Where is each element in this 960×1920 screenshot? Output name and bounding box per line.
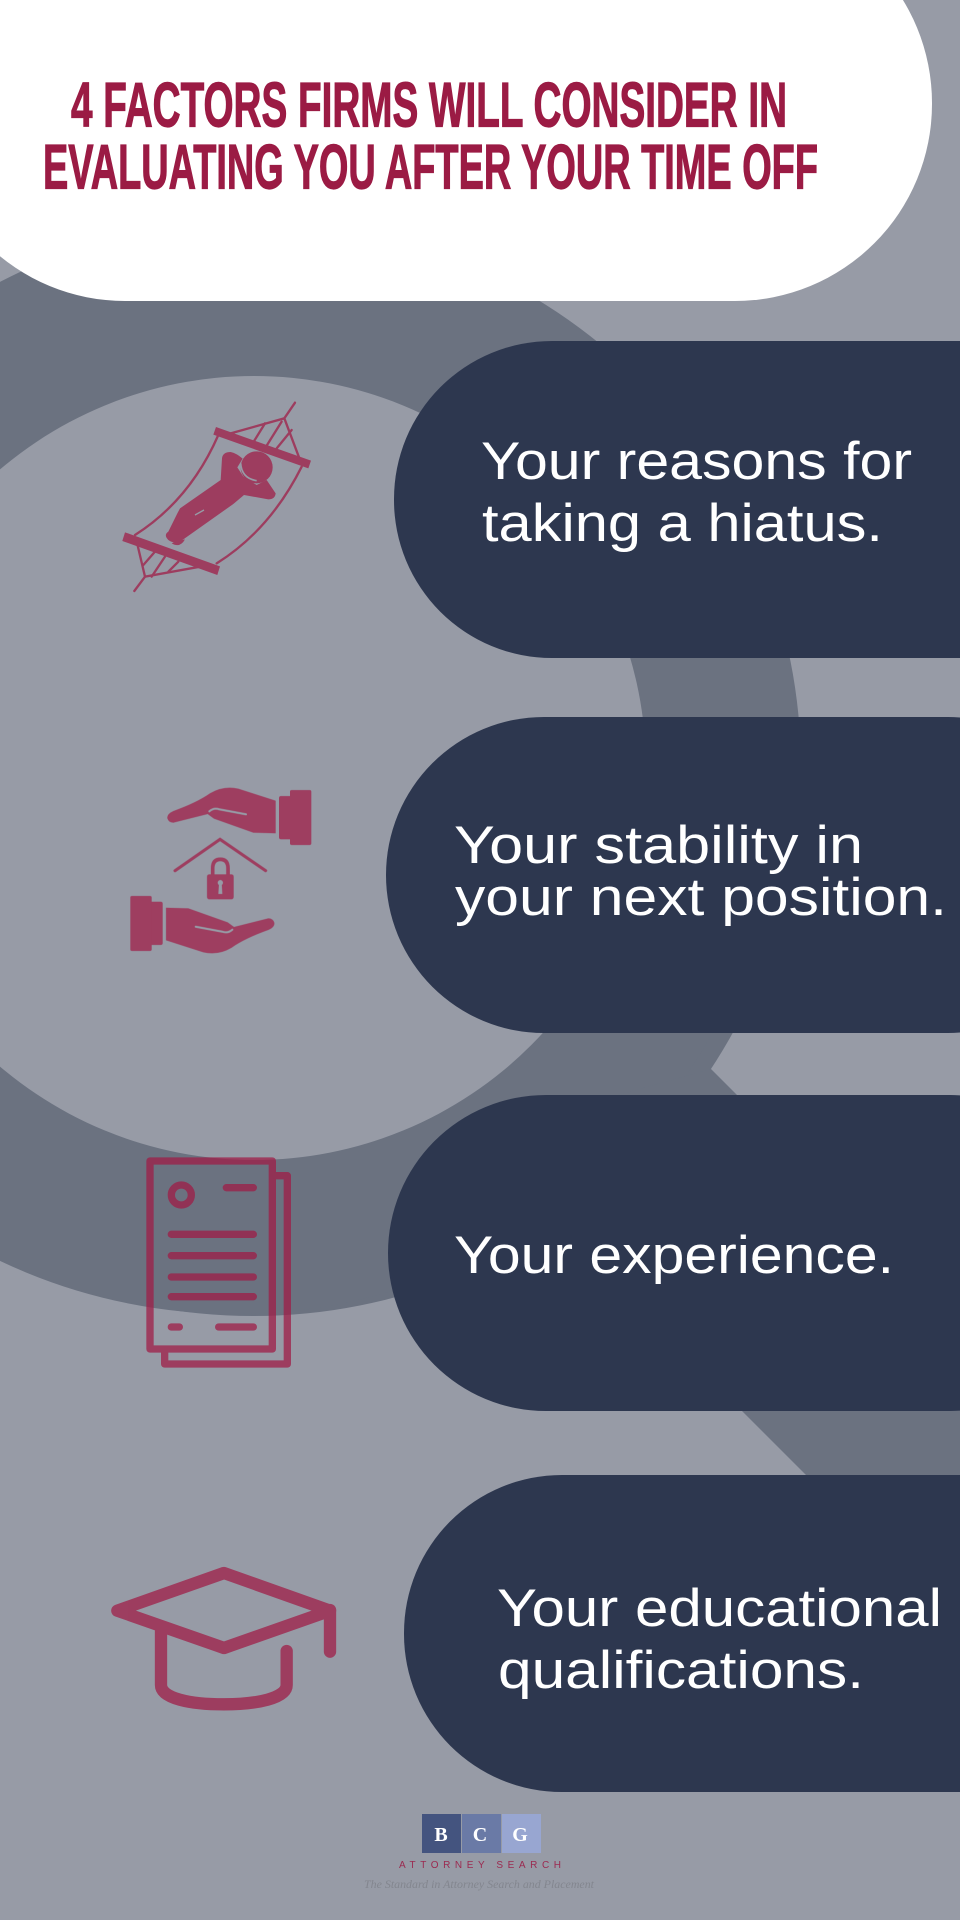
text: reasons — [481, 432, 912, 553]
panel: stability — [386, 717, 960, 1033]
background: dark ring circle — [0, 220, 801, 1316]
background: dark ring lower left — [0, 768, 781, 1314]
text: reasons: Your reasons for — [481, 432, 912, 491]
pill background 2 — [386, 717, 960, 1033]
logo square B: B — [434, 1824, 448, 1846]
logo: BCG Attorney Search — [364, 1814, 595, 1891]
title — [43, 70, 818, 202]
text: education — [497, 1579, 942, 1700]
background: light inner circle — [0, 376, 646, 1160]
text: education: Your educational — [497, 1579, 942, 1638]
text: reasons: taking a hiatus. — [482, 494, 883, 553]
background: diagonal dark band — [600, 1069, 960, 1669]
pill background 4 — [404, 1475, 960, 1792]
panel: experience — [388, 1095, 960, 1411]
logo square G: G — [512, 1824, 528, 1846]
text: stability — [454, 816, 947, 927]
logo square C: C — [473, 1824, 487, 1846]
panel: reasons for hiatus — [394, 341, 960, 658]
header panel — [0, 0, 932, 301]
panel: education — [404, 1475, 960, 1792]
logo square B — [422, 1814, 461, 1853]
text: stability: Your stability in — [454, 816, 863, 875]
icon: graduation cap — [117, 1573, 330, 1704]
logo tagline: The Standard in Attorney Search and Placement — [364, 1879, 595, 1891]
text: experience: Your experience. — [454, 1226, 894, 1285]
text: stability: your next position. — [455, 868, 947, 927]
logo square G — [502, 1814, 541, 1853]
icon: hands protecting house lock — [130, 788, 311, 953]
text: education: qualifications. — [498, 1641, 864, 1700]
pill background 1 — [394, 341, 960, 658]
icon: person in hammock — [122, 403, 311, 591]
pill background 3 — [388, 1095, 960, 1411]
logo subtitle: ATTORNEY SEARCH — [399, 1860, 561, 1871]
logo square C — [462, 1814, 501, 1853]
icon: resume document — [150, 1161, 287, 1364]
header white shape — [0, 0, 932, 301]
